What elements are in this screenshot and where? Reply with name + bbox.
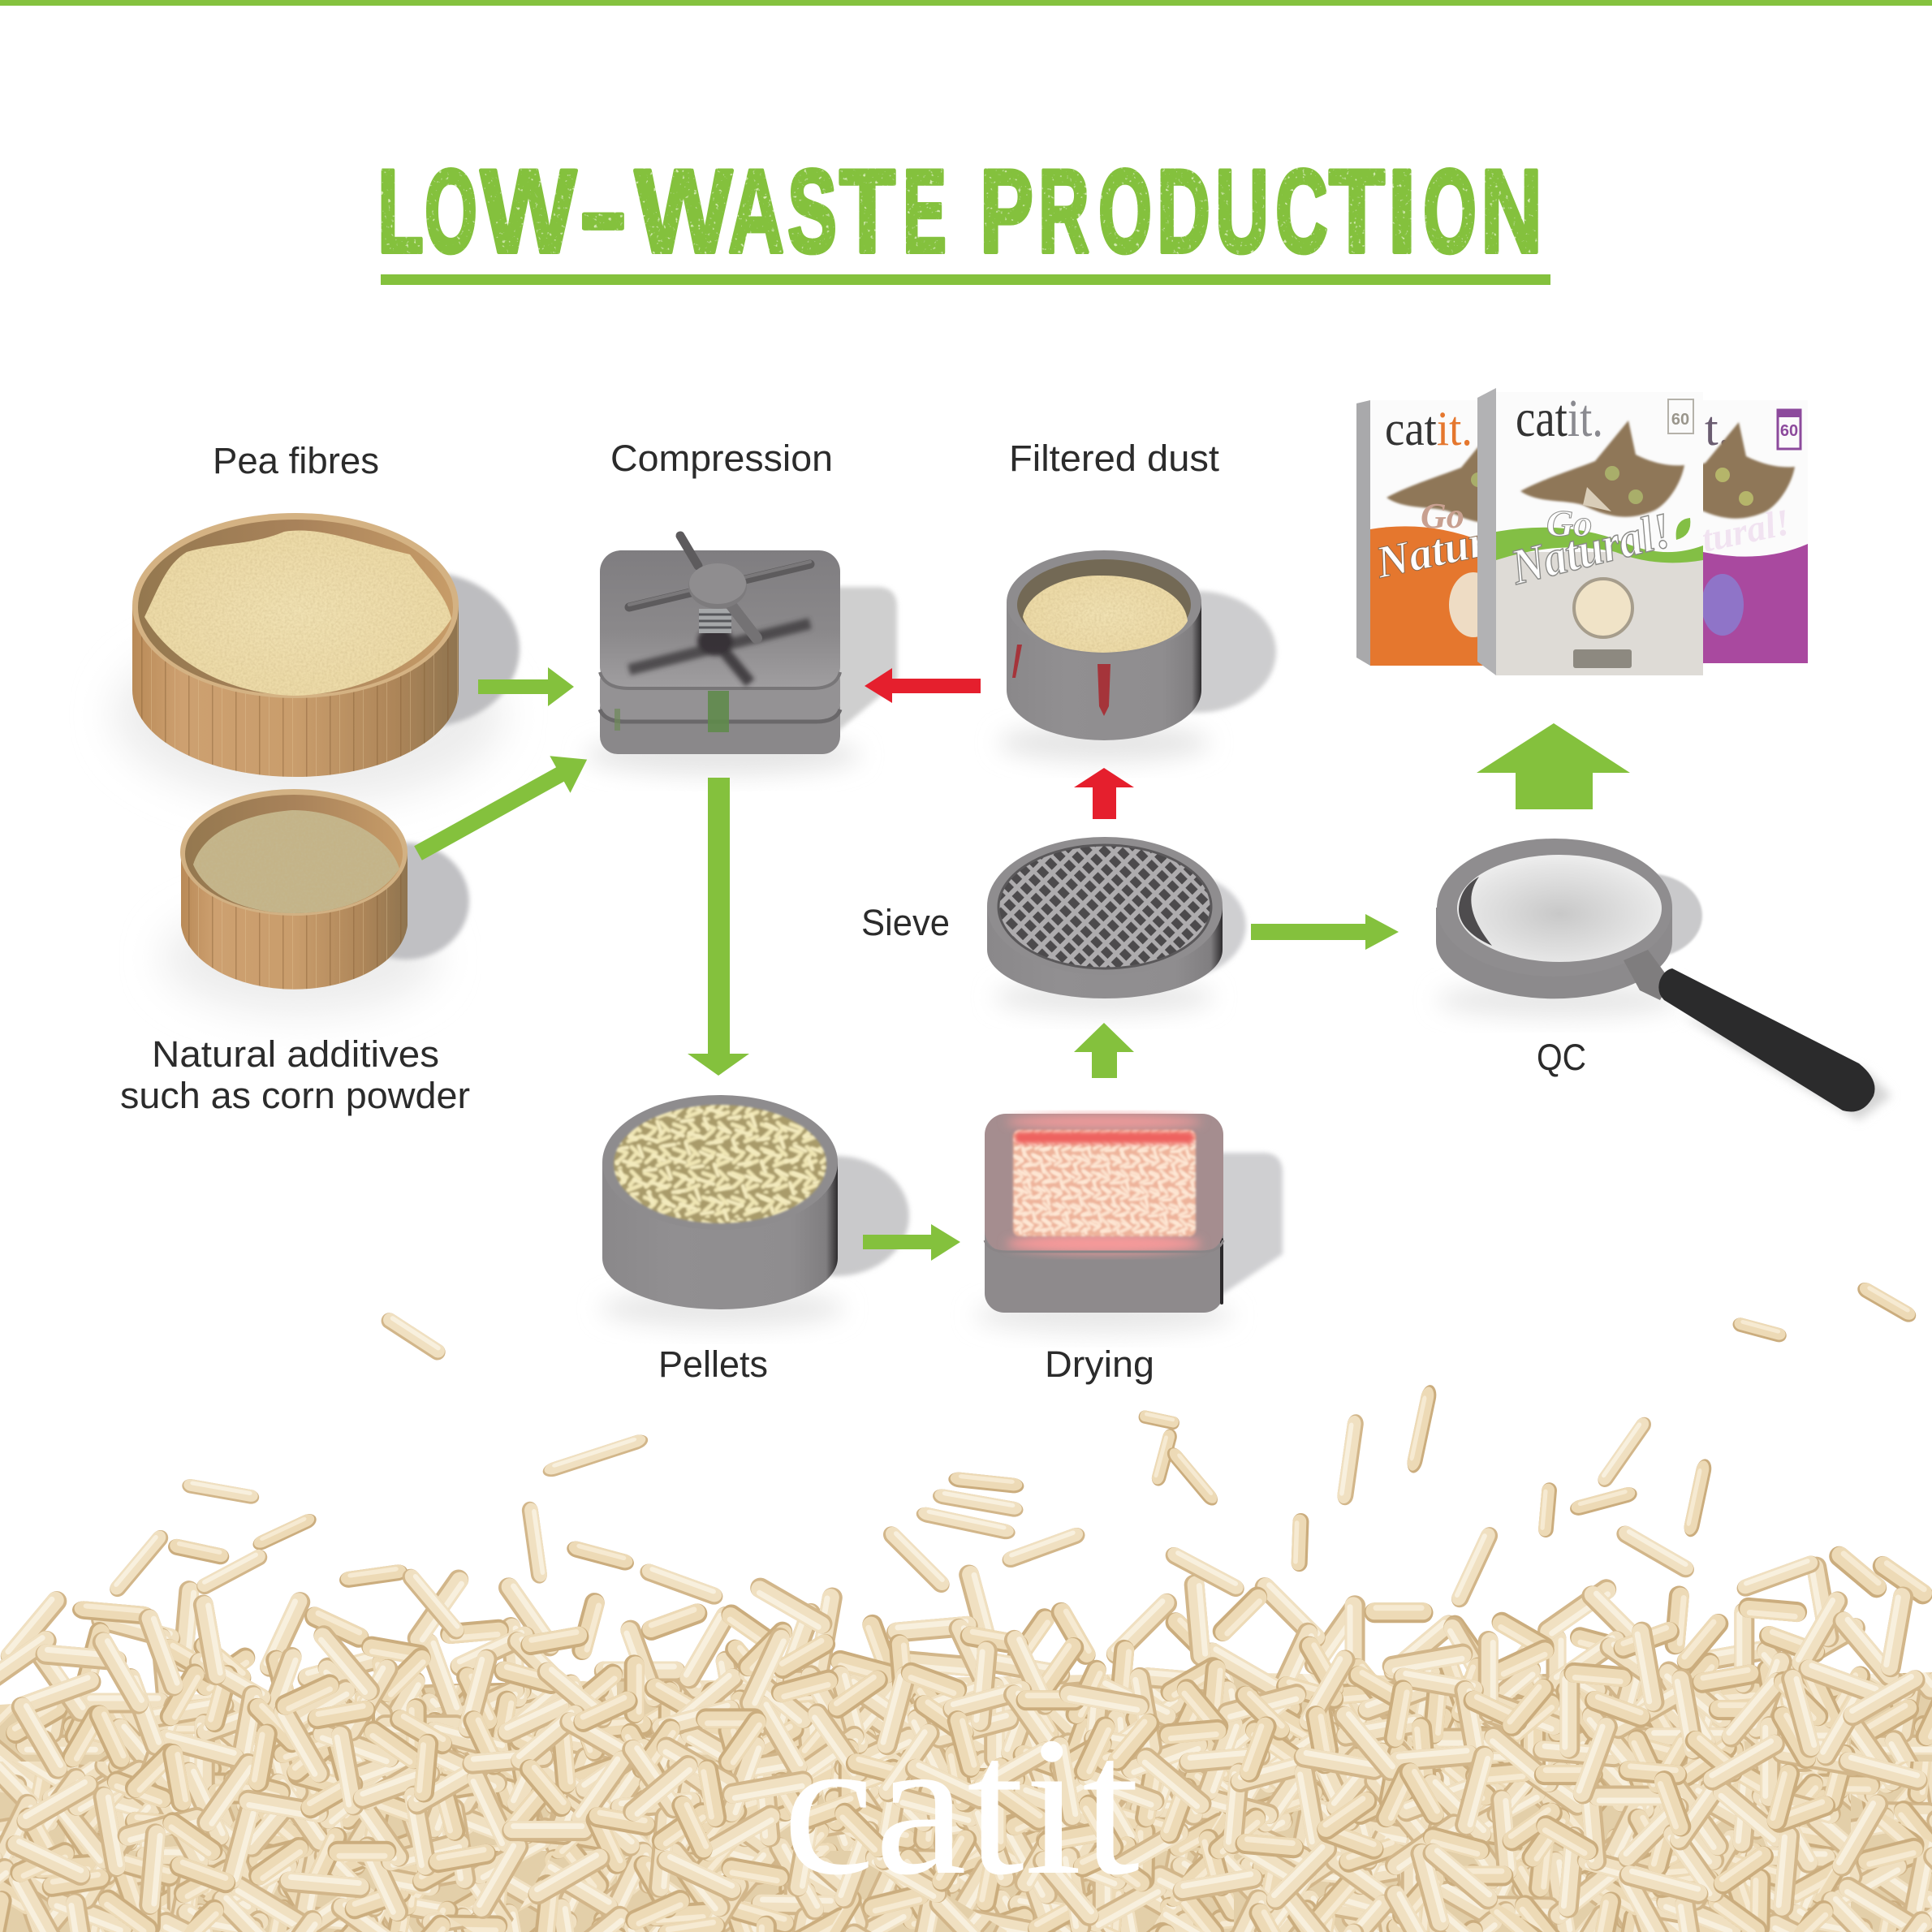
title: S: [787, 144, 837, 278]
arrow: pea fibres to compression: [478, 667, 574, 706]
title: A: [728, 144, 784, 278]
arrow: pellets to drying: [863, 1224, 960, 1261]
top green bar: [0, 0, 1932, 6]
title: T: [1329, 144, 1385, 278]
label: compression: Compression: [610, 438, 833, 479]
title: R: [1038, 144, 1089, 278]
title: I: [1387, 144, 1417, 278]
panel: pea fibres bowl: [114, 440, 520, 804]
panel: drying tray: [974, 1114, 1283, 1385]
title: D: [1157, 144, 1210, 278]
arrow: filtered dust to compression: [865, 668, 981, 703]
box: orange: [1356, 400, 1483, 666]
box: orange: Go: [1421, 496, 1464, 536]
title: T: [839, 144, 895, 278]
label: pea fibres: Pea fibres: [213, 440, 379, 481]
label: drying: Drying: [1045, 1343, 1154, 1385]
catit logo: catit: [783, 1696, 1140, 1916]
arrow: QC to finished product: [1477, 723, 1630, 809]
title: [377, 144, 1550, 285]
title: E: [903, 144, 947, 278]
title: O: [1423, 144, 1477, 278]
title: W: [481, 144, 576, 278]
box: orange: catit.: [1385, 402, 1473, 455]
box: natural centre: Go: [1546, 502, 1592, 544]
box: natural centre: [1477, 388, 1703, 675]
arrow: drying to sieve: [1074, 1023, 1134, 1078]
panel: quality control magnifier: [1436, 839, 1891, 1120]
panel: pellets bowl: [601, 1095, 909, 1385]
title: O: [425, 144, 477, 278]
box: purple: 60: [1780, 422, 1798, 440]
box: natural centre: 60: [1671, 411, 1689, 429]
title: -: [579, 144, 627, 278]
title: L: [377, 144, 424, 278]
label: filtered dust: Filtered dust: [1009, 438, 1220, 479]
title: C: [1275, 144, 1328, 278]
title: U: [1215, 144, 1269, 278]
title: W: [635, 144, 732, 278]
arrow: compression to pellets: [688, 778, 749, 1076]
box: natural centre: catit.: [1516, 389, 1603, 448]
panel: filtered dust cup: [998, 438, 1276, 762]
label: QC: QC: [1537, 1037, 1586, 1078]
label: sieve: Sieve: [861, 902, 950, 943]
label: pellets: Pellets: [658, 1343, 768, 1385]
panel: natural additives bowl: [120, 789, 470, 1116]
icon: cat: [1520, 420, 1684, 517]
box: natural centre: Natural!: [1505, 502, 1676, 596]
box: purple: [1703, 409, 1808, 663]
box: orange: Natur: [1371, 515, 1492, 589]
title: P: [980, 144, 1033, 278]
arrow: sieve to filtered dust: [1074, 768, 1134, 819]
box: purple: t.: [1705, 402, 1731, 455]
panel: sieve: [861, 837, 1246, 1015]
label: natural additives: Natural additives: [152, 1033, 439, 1075]
title: O: [1098, 144, 1152, 278]
arrow: additives to compression: [408, 741, 597, 872]
box: purple: tural!: [1697, 501, 1794, 560]
panel: compression press: [584, 438, 897, 775]
title: N: [1481, 144, 1542, 278]
pellet field at the bottom: [0, 1287, 1932, 1932]
panel: product boxes: [1356, 388, 1808, 675]
arrow: sieve to QC: [1251, 914, 1399, 950]
label: corn powder: such as corn powder: [120, 1075, 470, 1116]
stray pellets: [0, 1287, 1926, 1900]
